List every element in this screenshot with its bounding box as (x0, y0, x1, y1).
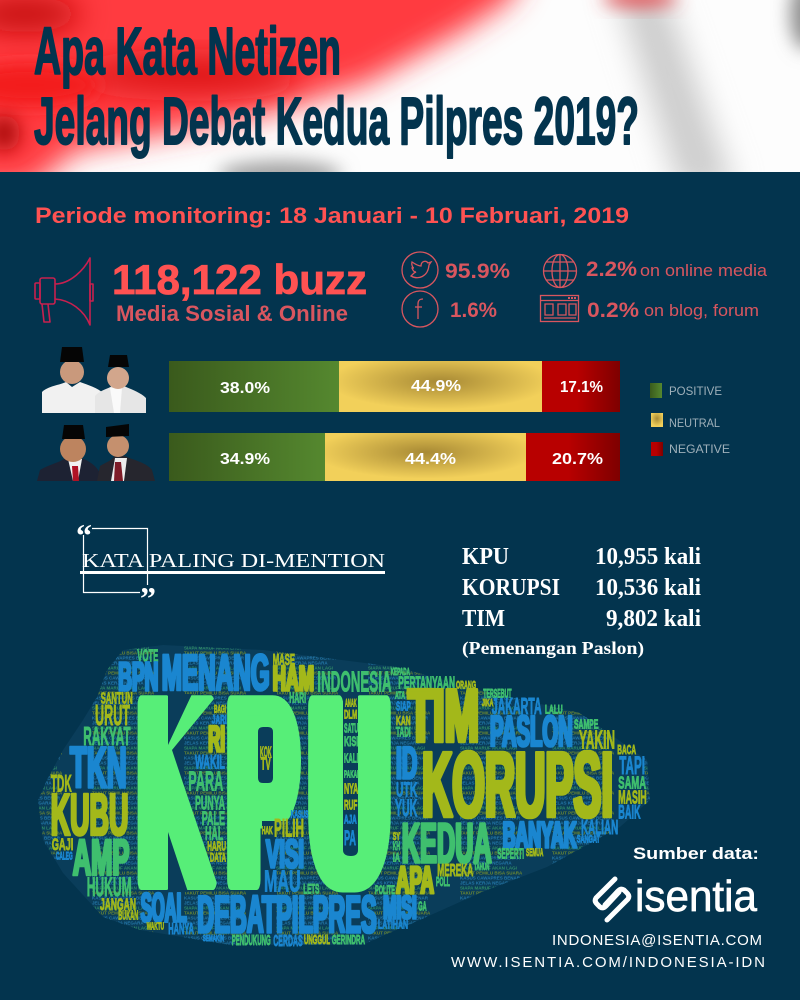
word cloud: PALE (202, 808, 225, 830)
word cloud: TKN (70, 735, 127, 800)
word cloud: URUT (95, 700, 130, 732)
word cloud: BPN (118, 654, 158, 700)
word cloud: SIAP (396, 699, 411, 714)
top mentioned words list: TIM (462, 606, 505, 632)
bar: Prabowo-Sandi sentiment: 34.9% (220, 451, 270, 468)
word cloud: INDONESIA (317, 667, 392, 699)
word cloud: JARI (212, 712, 227, 726)
word cloud (30, 640, 660, 950)
bar: Prabowo-Sandi sentiment: 44.4% (405, 451, 456, 468)
legend: NEGATIVE (669, 442, 730, 456)
word cloud: KAN (396, 713, 411, 728)
word cloud: UTK (396, 780, 417, 802)
word cloud: PA (344, 827, 356, 850)
word: KPU: K (141, 650, 208, 934)
word cloud: GA (418, 899, 427, 914)
icon: browser window (540, 296, 578, 322)
portrait: Jokowi and Ma'ruf (42, 347, 146, 413)
top mentioned words list: 9,802 kali (606, 606, 701, 632)
top mentioned words list: (Pemenangan Paslon) (462, 638, 644, 659)
word cloud: HAL (205, 823, 223, 845)
portrait: Prabowo and Sandiaga (37, 424, 155, 481)
twitter share: 95.9% (445, 260, 510, 283)
word cloud: DATA (210, 851, 226, 865)
top mentioned words list (462, 544, 701, 659)
word cloud: RAKYAT (83, 723, 131, 751)
bar: Prabowo-Sandi sentiment (169, 433, 620, 481)
word cloud: SEPERTI (497, 846, 524, 862)
word cloud: AMP (73, 829, 129, 886)
word cloud: YUK (395, 795, 418, 822)
word cloud: HANYA (168, 921, 194, 938)
word cloud: TADI (396, 725, 411, 740)
monitoring period: Periode monitoring: 18 Januari - 10 Februari, 2019 (35, 203, 629, 228)
legend: NEUTRAL (669, 416, 720, 430)
word cloud: MASIH (618, 786, 647, 807)
word cloud: ID (396, 737, 417, 788)
icon: globe (544, 254, 576, 288)
bar: Jokowi-Ma'ruf sentiment: 38.0% (220, 380, 270, 397)
word cloud: JIKA (482, 698, 493, 709)
blog and forum share: 0.2% (587, 299, 639, 322)
word cloud: HARI (289, 690, 306, 706)
word cloud: DEBATPILPRES (197, 886, 377, 945)
blog and forum share: on blog, forum (644, 301, 759, 320)
facebook share: 1.6% (450, 299, 497, 322)
word cloud: KH (393, 839, 400, 853)
word cloud: YAKIN (579, 726, 615, 754)
word cloud: BACA (617, 742, 636, 757)
word cloud: SEMAKIN (203, 933, 224, 943)
word cloud: PASLON (490, 708, 573, 756)
buzz total: 118,122 buzz (112, 256, 367, 303)
chart: sentiment bars (169, 361, 620, 481)
word cloud: POLITE (375, 884, 395, 897)
word cloud: PUNYA (195, 792, 225, 814)
word cloud: GAJI (52, 835, 73, 854)
bar: Prabowo-Sandi sentiment: 20.7% (552, 451, 603, 468)
header banner: blurred flag (0, 0, 800, 190)
word cloud: SY (393, 831, 400, 843)
word cloud: KEPADA (391, 667, 410, 678)
word cloud: TERSEBUT (483, 687, 512, 700)
word cloud: TAHUN (474, 862, 489, 873)
word cloud: GERINDRA (332, 932, 365, 947)
word cloud: ANAK (345, 698, 357, 710)
word cloud: JANGAN (100, 895, 136, 914)
top mentioned words list: KORUPSI (462, 575, 560, 601)
word cloud: KOK (260, 744, 272, 761)
word cloud: VOTE (137, 646, 158, 666)
word: TIM: TIM (408, 674, 479, 758)
word cloud: BUKAN (118, 908, 138, 922)
contact website: WWW.ISENTIA.COM/INDONESIA-IDN (451, 954, 765, 971)
heading: most mentioned words: ” (140, 580, 156, 616)
word cloud: RUF (344, 797, 357, 812)
word cloud: SAMPE (574, 716, 598, 731)
word cloud: MASE (273, 652, 295, 669)
word cloud: BAIK (618, 801, 641, 823)
bar: Jokowi-Ma'ruf sentiment: 17.1% (560, 379, 603, 396)
title: Apa Kata Netizen (34, 14, 341, 89)
legend (650, 383, 730, 456)
word cloud: NYA (344, 781, 359, 797)
word cloud: HAK (262, 825, 273, 837)
word cloud: SAMA (618, 772, 646, 792)
word cloud: SANTUN (101, 690, 133, 707)
word cloud: WAKIL (195, 751, 225, 773)
bar: Jokowi-Ma'ruf sentiment (169, 361, 620, 412)
word cloud: HUKUM (87, 872, 132, 902)
word cloud: POLL (436, 875, 450, 889)
word cloud: UNGGUL (304, 932, 330, 947)
word cloud: DLM (344, 707, 357, 721)
word cloud: U (312, 650, 387, 934)
online media share (586, 258, 768, 281)
word cloud: CERDAS (273, 933, 303, 950)
heading: most mentioned words: “ (76, 517, 92, 553)
word cloud: LETS (303, 881, 319, 896)
word cloud: JAKARTA (492, 693, 542, 719)
word cloud: WAKTU (147, 921, 164, 932)
word cloud: MEREKA (437, 860, 474, 880)
blog and forum share (587, 299, 759, 322)
word cloud: MAU (264, 865, 301, 899)
word: KPU: P (230, 650, 294, 934)
word cloud: ORANG (456, 679, 476, 691)
word cloud: SEMUA (526, 847, 543, 859)
word cloud: MENANG (162, 644, 270, 701)
word cloud: KEDUA (402, 812, 492, 875)
word cloud: KALIAN (581, 817, 618, 839)
word cloud: IA (393, 851, 400, 865)
word cloud: TV (261, 753, 271, 773)
online media share: on online media (640, 261, 768, 280)
word cloud: RI (208, 718, 225, 760)
word cloud: SANGAT (577, 834, 600, 846)
icon: megaphone (35, 258, 93, 325)
word cloud: LATIHAN (378, 917, 408, 931)
buzz subtitle: Media Sosial & Online (116, 301, 348, 326)
logo: isentia: isentia (635, 872, 758, 921)
word cloud: BAGI (214, 704, 226, 716)
icon: twitter (402, 252, 438, 288)
word cloud: KASUS (291, 809, 309, 820)
word cloud: TDK (51, 771, 72, 798)
title (34, 14, 639, 159)
word cloud: AJA (344, 812, 357, 826)
word cloud: TAPI (619, 752, 645, 780)
legend: POSITIVE (669, 384, 722, 398)
top mentioned words list: 10,536 kali (595, 575, 701, 601)
word cloud: PERTANYAAN (398, 672, 455, 692)
word cloud: CALEG (56, 850, 73, 862)
word cloud: SATU (344, 722, 358, 736)
word cloud: LALU (545, 702, 563, 716)
top mentioned words list: KPU (462, 544, 509, 570)
word cloud: KISI (344, 734, 358, 749)
online media share: 2.2% (586, 258, 637, 281)
data source label: Sumber data: (633, 844, 759, 863)
word cloud: PAKAI (344, 769, 358, 780)
word cloud: MISI (383, 889, 417, 925)
heading: most mentioned words (76, 517, 385, 616)
word cloud: BANYAK (503, 813, 577, 855)
word cloud: HARU (207, 839, 226, 854)
word cloud: APA (396, 859, 434, 902)
word cloud: PENDUKUNG (232, 933, 271, 949)
contact email: INDONESIA@ISENTIA.COM (552, 932, 762, 949)
word cloud: PARA (188, 766, 223, 797)
icon: facebook (402, 291, 438, 327)
top mentioned words list: 10,955 kali (595, 544, 701, 570)
heading: most mentioned words: KATA PALING DI-MENTION (82, 550, 385, 572)
word cloud: KALI (344, 752, 358, 766)
word cloud: SOAL (141, 885, 187, 931)
word cloud: HAM (273, 660, 314, 699)
word cloud: PILIH (274, 815, 304, 843)
word cloud: KUBU (51, 781, 128, 848)
word cloud: VISI (266, 832, 304, 876)
bar: Jokowi-Ma'ruf sentiment: 44.9% (411, 378, 461, 395)
word cloud: ATA (395, 690, 405, 701)
